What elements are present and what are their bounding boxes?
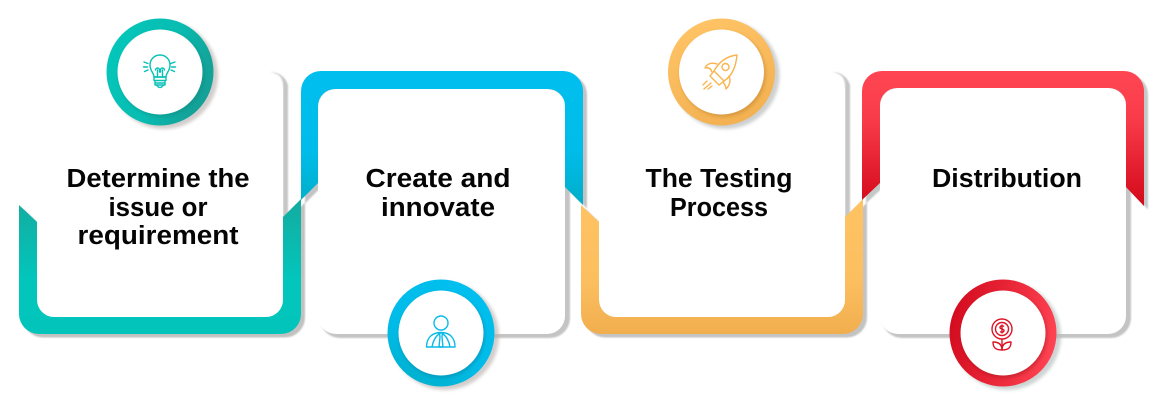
heading: create and innovate: innovate <box>381 194 495 222</box>
heading: determine the issue or requirement: requirement <box>78 222 239 250</box>
badge: teal lightbulb <box>106 18 218 129</box>
icon: money flower <box>992 319 1012 350</box>
teal frame <box>19 199 301 334</box>
heading: determine the issue or requirement: Determine the <box>66 165 250 193</box>
heading: the testing process <box>646 165 792 222</box>
card 2: create and innovate <box>301 71 587 338</box>
card 1: determine the issue or requirement <box>19 72 305 338</box>
heading: distribution: Distribution <box>932 165 1082 193</box>
heading: determine the issue or requirement: issue or <box>108 194 208 222</box>
badge: yellow rocket <box>668 18 780 129</box>
heading: create and innovate <box>366 165 510 222</box>
badge: red money flower <box>950 280 1061 390</box>
card 3: the testing process <box>581 72 867 338</box>
icon: rocket <box>703 55 737 89</box>
yellow frame <box>581 199 863 334</box>
badge: blue person <box>388 280 499 390</box>
heading: the testing process: The Testing <box>646 165 792 193</box>
card 4: distribution <box>862 71 1148 338</box>
icon: lightbulb <box>144 55 176 88</box>
heading: determine the issue or requirement <box>66 165 250 250</box>
heading: the testing process: Process <box>670 194 768 222</box>
red frame <box>862 71 1144 206</box>
blue frame <box>301 71 583 205</box>
heading: create and innovate: Create and <box>366 165 510 193</box>
icon: person with tie <box>426 316 455 347</box>
